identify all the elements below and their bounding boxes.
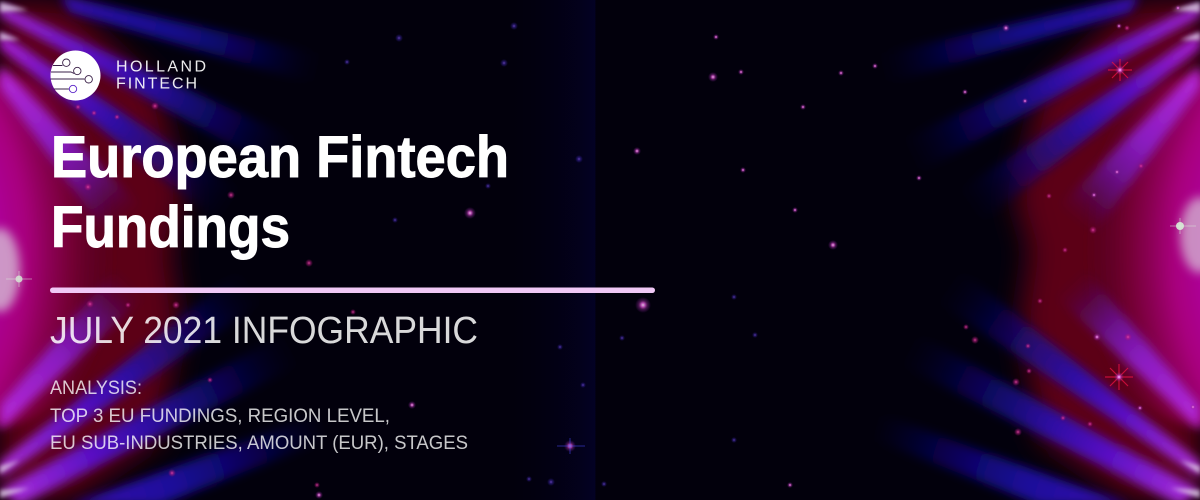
right light burst <box>875 0 1200 500</box>
analysis text: EU SUB-INDUSTRIES, AMOUNT (EUR), STAGES <box>50 432 468 454</box>
logo icon <box>50 50 100 100</box>
title <box>51 125 509 260</box>
analysis text <box>50 377 468 454</box>
star: red burst bottom right <box>1105 364 1133 390</box>
glow: left core <box>0 228 20 312</box>
logo wordmark <box>116 58 206 92</box>
logo <box>50 50 206 100</box>
analysis text: ANALYSIS: <box>50 377 142 399</box>
star: white left <box>6 271 32 287</box>
analysis text: TOP 3 EU FUNDINGS, REGION LEVEL, <box>50 405 390 427</box>
divider rule <box>50 288 655 293</box>
title: Fundings <box>51 195 290 260</box>
subtitle: JULY 2021 INFOGRAPHIC <box>50 310 478 352</box>
star: blue flare bottom <box>557 438 585 454</box>
glow: right core <box>1180 197 1200 273</box>
logo wordmark: HOLLAND <box>116 58 206 76</box>
logo wordmark: FINTECH <box>116 76 197 92</box>
title: European Fintech <box>51 125 509 190</box>
star: red burst top right <box>1108 59 1132 81</box>
left light burst <box>0 0 325 500</box>
star: white right <box>1170 218 1196 234</box>
central blue band <box>510 0 596 500</box>
